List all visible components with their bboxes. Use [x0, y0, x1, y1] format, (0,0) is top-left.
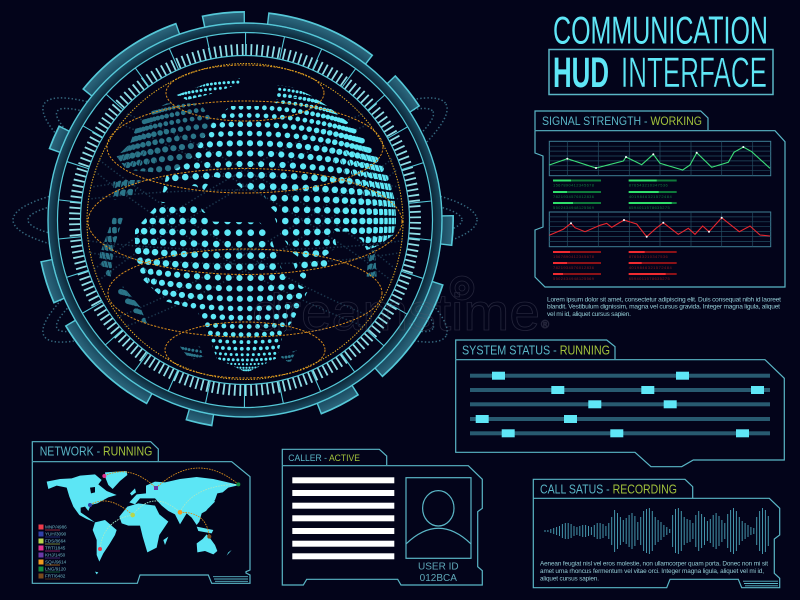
user id: 012BCA	[420, 573, 457, 584]
red status bars	[553, 251, 677, 281]
hudson bay	[90, 487, 95, 493]
panel: signal strength	[535, 111, 785, 318]
dial tick marks	[69, 44, 421, 396]
main dial ring	[48, 23, 442, 417]
panel description: aliquet cursus sapien.	[540, 576, 599, 583]
icon: user portrait	[406, 478, 471, 558]
panel heading: SIGNAL STRENGTH - WORKING	[542, 114, 702, 128]
green status bars: 4019846321572484	[629, 194, 672, 199]
chart: green signal	[549, 141, 771, 176]
user id: USER ID	[418, 562, 459, 572]
panel description: Lorem ipsum dolor sit amet, consectetur adipiscing elit. Duis consequat nibh id laoreet	[547, 296, 781, 304]
panel heading: CALLER - ACTIVE	[288, 453, 360, 464]
slider tracks	[470, 374, 770, 435]
redacted text bars	[292, 477, 394, 559]
panel heading: CALL SATUS - RECORDING	[540, 482, 677, 496]
panel description: vel mi id, aliquet cursus sapien.	[547, 311, 631, 318]
globe backing disc	[49, 24, 441, 416]
map legend: YUH/3090	[45, 532, 67, 536]
panel description	[540, 561, 768, 583]
panel: caller	[282, 449, 482, 585]
map legend: KHJ/1450	[45, 552, 66, 558]
panel description: Aenean feugiat nisl vel eros molestie, non ullamcorper quam porta. Donec non mi sit	[540, 561, 768, 568]
red status bars: 7821934576012836	[553, 265, 595, 270]
panel description: blandit. Vestibulum dignissim, magna vel cursus gravida. Integer magna ligula, aliquet	[547, 304, 780, 311]
panel frame	[456, 340, 784, 467]
map legend	[38, 524, 67, 579]
dotted orbit halos	[13, 66, 477, 374]
HUD word: HUD	[553, 49, 609, 97]
user id	[418, 562, 459, 584]
corner stripes	[743, 581, 778, 586]
world map	[47, 468, 240, 574]
network nodes	[88, 474, 240, 551]
green status bars: 6594011578635275	[629, 205, 670, 210]
green status bars: 876543210347536	[629, 182, 668, 188]
red status bars: 6594011578635275	[629, 276, 670, 281]
map legend: FDS/8664	[45, 538, 66, 544]
watermark: dreamstime	[252, 284, 540, 342]
green status bars	[553, 180, 677, 210]
map legend: LNG/9120	[45, 566, 66, 572]
red status bars: 876543210347536	[629, 254, 668, 259]
panel frame	[533, 479, 780, 588]
green status bars: 1567890412345678	[553, 182, 595, 188]
corner stripes	[213, 577, 248, 581]
green status bars: 5502434948125569	[553, 205, 595, 210]
red status bars: 4019846321572484	[629, 265, 672, 270]
map legend: FRT/6482	[45, 574, 66, 578]
dim far-side dots	[99, 103, 377, 362]
title box	[549, 50, 773, 94]
map legend: TRT/1845	[45, 546, 66, 550]
map legend: MNP/4986	[45, 524, 67, 530]
globe HUD	[13, 18, 477, 422]
panel description	[547, 296, 781, 318]
chart: red signal	[549, 212, 771, 247]
orange orbit rings	[87, 64, 403, 380]
panel heading: NETWORK - RUNNING	[40, 445, 152, 459]
panel frame	[535, 111, 785, 287]
slider knobs	[476, 372, 764, 437]
faint orbits across globe	[86, 114, 403, 328]
panel frame	[32, 442, 250, 583]
panel: system status	[456, 340, 784, 467]
green status bars: 7821934576012836	[553, 194, 595, 199]
network arcs	[90, 468, 238, 549]
title	[549, 10, 773, 97]
panel heading: SYSTEM STATUS - RUNNING	[462, 343, 610, 357]
audio waveform	[545, 508, 768, 554]
panel description: amet urna rhoncus fermentum vel vitae orci. Integer magna ligula, aliquet vel mi id,	[540, 568, 764, 575]
panel: network	[32, 442, 250, 583]
bright continent dots	[135, 78, 396, 372]
red status bars: 1567890412345678	[553, 254, 595, 259]
watermark: ®	[541, 319, 549, 331]
outer gear segments	[42, 18, 448, 422]
map legend: SQA/9614	[45, 560, 67, 564]
red status bars: 5502434948125569	[553, 276, 595, 281]
panel: call status	[533, 479, 780, 588]
panel frame	[282, 449, 482, 585]
